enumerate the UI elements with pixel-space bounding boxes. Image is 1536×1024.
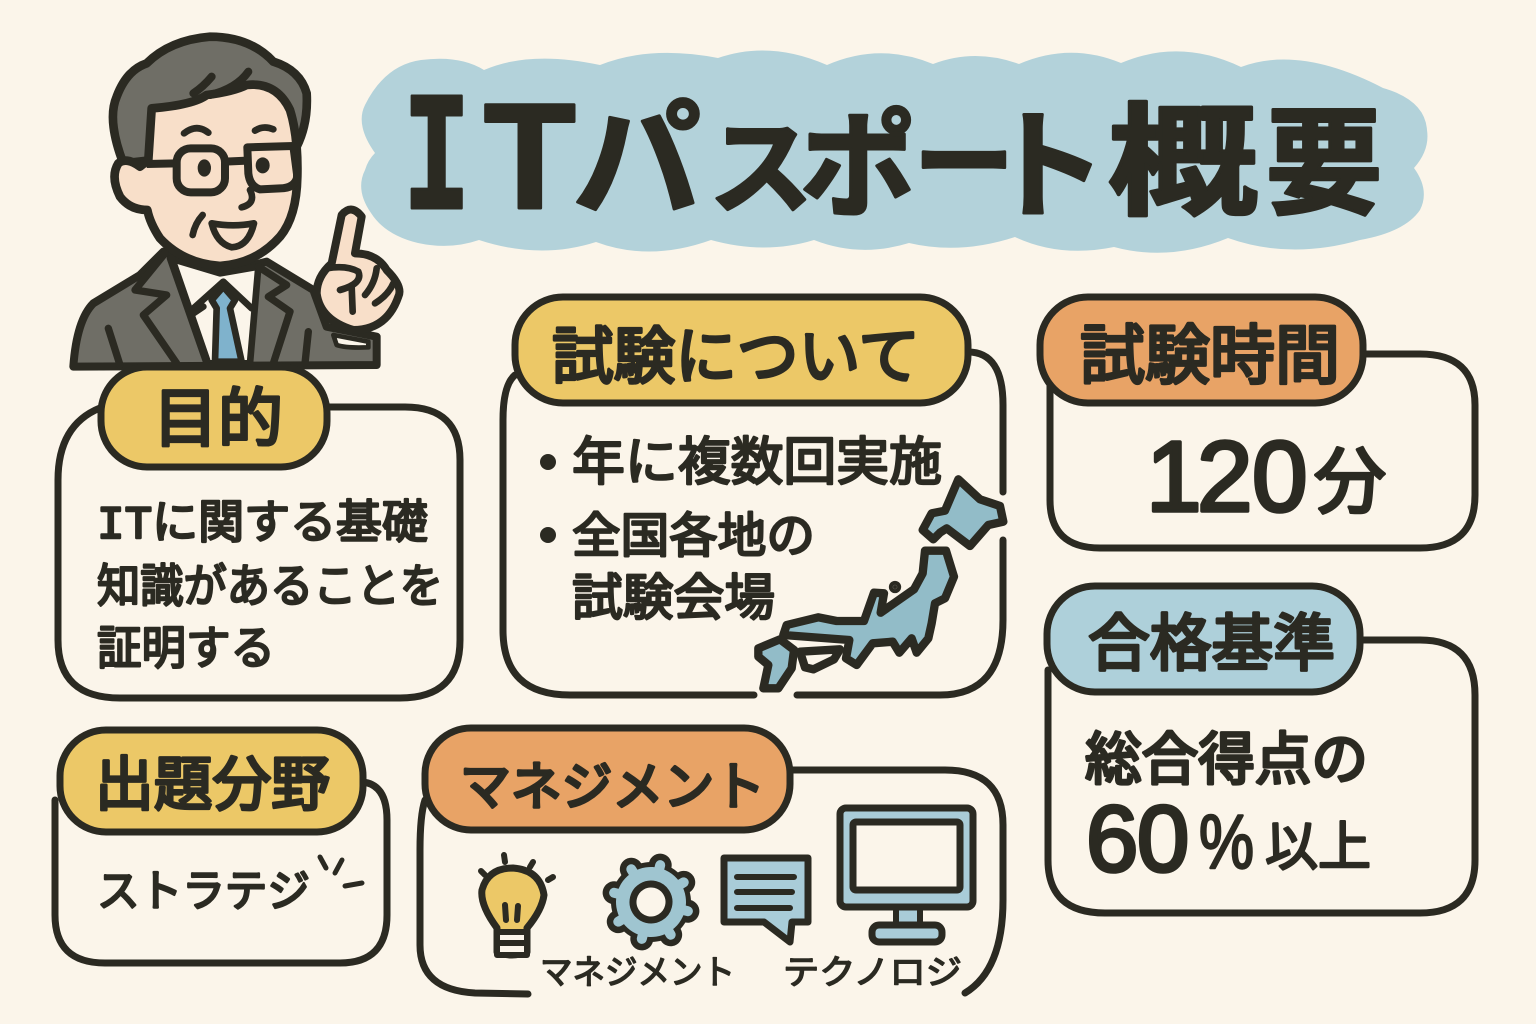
passing criteria text: %	[1199, 800, 1254, 885]
title banner: T	[484, 72, 576, 240]
eyes	[198, 159, 211, 177]
title banner: 概	[1108, 95, 1258, 231]
title banner	[361, 50, 1427, 260]
panel: management	[420, 728, 1003, 994]
technology label: テクノロジ	[783, 954, 962, 992]
strategy label: ストラテジ	[97, 867, 310, 916]
heading: passing criteria	[1047, 586, 1360, 692]
heading: about the exam: 試験について	[552, 323, 920, 392]
hand	[317, 210, 399, 330]
lapels	[108, 253, 308, 365]
purpose text: 知識があることを	[97, 560, 443, 612]
heading: purpose: 目的	[153, 383, 283, 455]
panel: purpose	[58, 367, 460, 698]
heading: management: マネジメント	[460, 759, 765, 817]
passing criteria text: 60	[1086, 786, 1189, 891]
heading: exam time	[1040, 297, 1363, 403]
heading: purpose	[101, 367, 327, 467]
passing criteria text	[1085, 728, 1371, 891]
title banner: ポ	[800, 102, 916, 232]
shirt	[170, 258, 258, 363]
hair strands	[193, 72, 248, 95]
title banner: パ	[573, 91, 701, 234]
eyebrows	[184, 127, 273, 133]
panel: passing criteria	[1047, 586, 1475, 913]
collar	[192, 282, 252, 313]
icon: speech bubble	[724, 858, 808, 942]
exam bullets: 全国各地の	[572, 510, 815, 563]
icon: monitor	[840, 808, 973, 942]
illustration: presenter pointing up	[73, 37, 399, 367]
panel: exam fields	[55, 730, 387, 963]
spark marks	[320, 857, 362, 886]
purpose text	[97, 496, 443, 674]
heading: exam time: 試験時間	[1080, 319, 1340, 392]
title banner: ト	[988, 102, 1106, 234]
title banner: ー	[914, 108, 1014, 220]
shirt cuff	[333, 335, 368, 348]
heading: exam fields	[60, 730, 363, 832]
value: 120 minutes: 分	[1314, 443, 1386, 523]
icon: light bulb	[481, 855, 553, 955]
heading: passing criteria: 合格基準	[1088, 610, 1335, 679]
suit jacket	[73, 252, 377, 367]
value: 120 minutes	[1146, 421, 1386, 533]
purpose text: ITに関する基礎	[97, 496, 428, 552]
ear and face	[115, 85, 297, 266]
glasses	[147, 146, 297, 192]
fingers	[327, 267, 393, 312]
panel: exam time	[1040, 297, 1475, 548]
title banner: ス	[709, 112, 813, 228]
exam bullets: 年に複数回実施	[572, 434, 942, 492]
heading: exam fields: 出題分野	[95, 752, 330, 818]
mouth	[212, 223, 254, 247]
purpose text: 証明する	[97, 622, 275, 674]
passing criteria text: 以上	[1265, 818, 1371, 877]
title banner: 要	[1266, 99, 1382, 229]
exam bullets: 試験会場	[572, 570, 775, 626]
exam bullets	[540, 434, 942, 626]
value: 120 minutes: 120	[1146, 421, 1308, 533]
hair	[113, 37, 307, 163]
passing criteria text: 総合得点の	[1085, 728, 1368, 792]
map of Japan	[758, 479, 1003, 688]
heading: management	[425, 728, 790, 830]
icon: gear	[603, 854, 699, 950]
nose and cheek	[193, 190, 252, 235]
title banner: I	[403, 68, 470, 260]
heading: about the exam	[515, 297, 968, 403]
panel: about the exam	[503, 297, 1003, 695]
tie	[212, 287, 242, 362]
management label: マネジメント	[540, 954, 735, 992]
